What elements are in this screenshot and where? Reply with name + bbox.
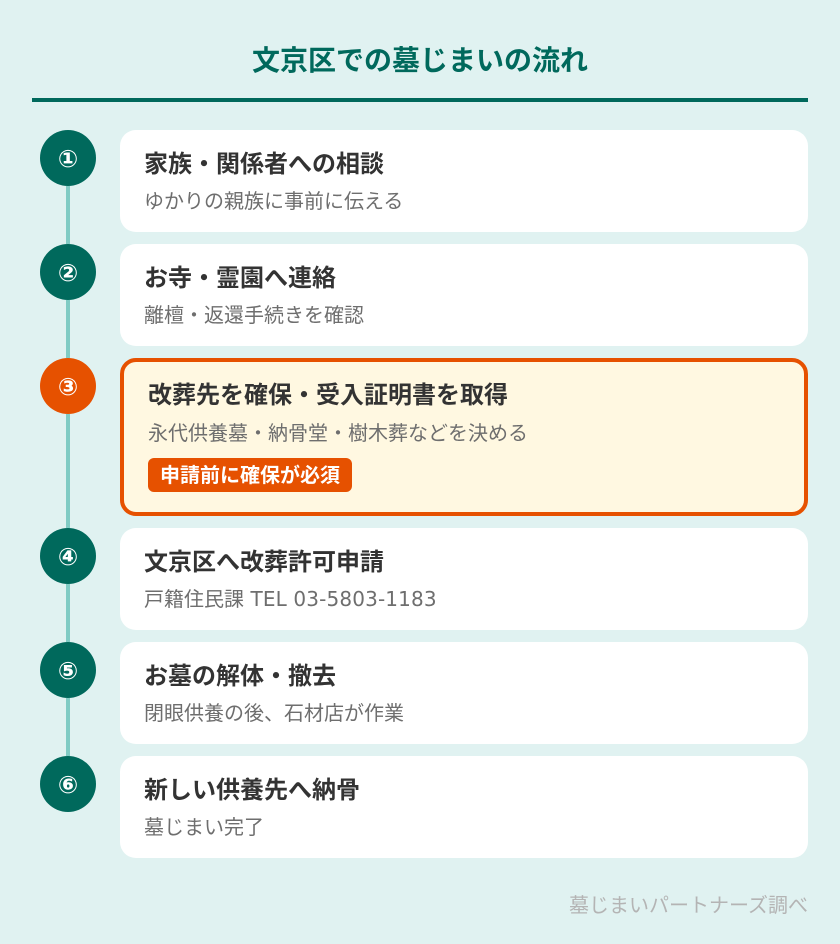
step 3 description: 永代供養墓・納骨堂・樹木葬などを決める — [148, 417, 528, 446]
step 1 card — [120, 130, 808, 232]
step 5 heading: お墓の解体・撤去 — [144, 656, 336, 691]
step 2 description: 離檀・返還手続きを確認 — [144, 299, 364, 328]
title underline — [32, 98, 808, 102]
step 4 description: 戸籍住民課 TEL 03-5803-1183 — [144, 583, 437, 612]
step 5 number — [40, 642, 96, 698]
timeline connector 1 — [66, 186, 70, 244]
step 2 card — [120, 244, 808, 346]
step 1 number: ① — [58, 145, 78, 173]
step 6 description: 墓じまい完了 — [144, 811, 264, 840]
step 5 card — [120, 642, 808, 744]
step 1 description: ゆかりの親族に事前に伝える — [144, 185, 403, 214]
timeline connector 5 — [66, 698, 70, 756]
step 6 heading: 新しい供養先へ納骨 — [144, 770, 360, 805]
step 2 number: ② — [58, 259, 78, 287]
step 3 heading: 改葬先を確保・受入証明書を取得 — [148, 375, 508, 410]
step 1 number — [40, 130, 96, 186]
step 3 badge: 申請前に確保が必須 — [160, 459, 340, 488]
timeline connector 2 — [66, 300, 70, 358]
step 4 heading: 文京区へ改葬許可申請 — [144, 542, 384, 577]
step 1 heading: 家族・関係者への相談 — [144, 144, 384, 179]
timeline connector 3 — [66, 414, 70, 528]
source footer: 墓じまいパートナーズ調べ — [569, 889, 808, 918]
step 4 card — [120, 528, 808, 630]
step 5 description: 閉眼供養の後、石材店が作業 — [144, 697, 404, 726]
step 6 number — [40, 756, 96, 812]
step 3 card (highlighted) — [120, 358, 808, 516]
step 5 number: ⑤ — [58, 657, 78, 685]
step 2 number — [40, 244, 96, 300]
step 4 number: ④ — [58, 543, 78, 571]
step 2 heading: お寺・霊園へ連絡 — [144, 258, 336, 293]
title: 文京区での墓じまいの流れ — [252, 39, 588, 79]
step 3 number (highlighted): ③ — [58, 373, 78, 401]
step 6 card — [120, 756, 808, 858]
step 4 number — [40, 528, 96, 584]
timeline connector 4 — [66, 584, 70, 642]
step 3 number (highlighted) — [40, 358, 96, 414]
step 6 number: ⑥ — [58, 771, 78, 799]
